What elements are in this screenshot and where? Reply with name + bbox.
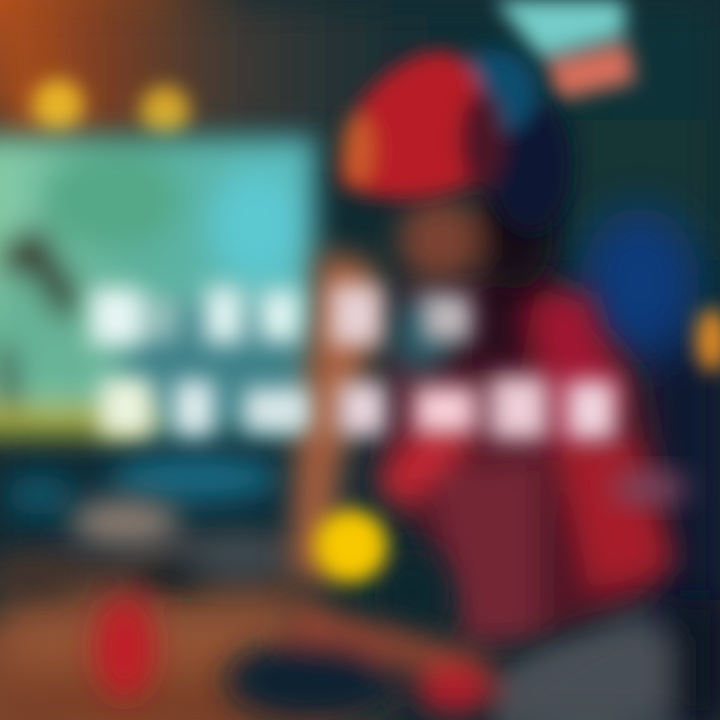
title line 2	[100, 376, 616, 440]
child: helmet	[339, 50, 572, 233]
child: head	[398, 180, 553, 290]
orange object at right edge	[696, 308, 720, 372]
bottom: legs, sleeve and cuff	[225, 600, 720, 720]
yellow ball	[314, 509, 388, 583]
desk items	[0, 498, 295, 700]
child: arm	[290, 250, 375, 590]
monitor screen	[0, 136, 320, 436]
faint label on shirt	[610, 472, 690, 504]
desk blue glow	[6, 454, 280, 515]
hanging yellow lights	[32, 79, 190, 136]
title line 1	[90, 284, 472, 346]
child: dark gap by hand	[374, 547, 450, 643]
blurred title (illegible in reference)	[90, 284, 616, 440]
child: backpack	[580, 207, 720, 720]
child: shirt	[372, 265, 680, 650]
top-right card	[495, 0, 636, 100]
